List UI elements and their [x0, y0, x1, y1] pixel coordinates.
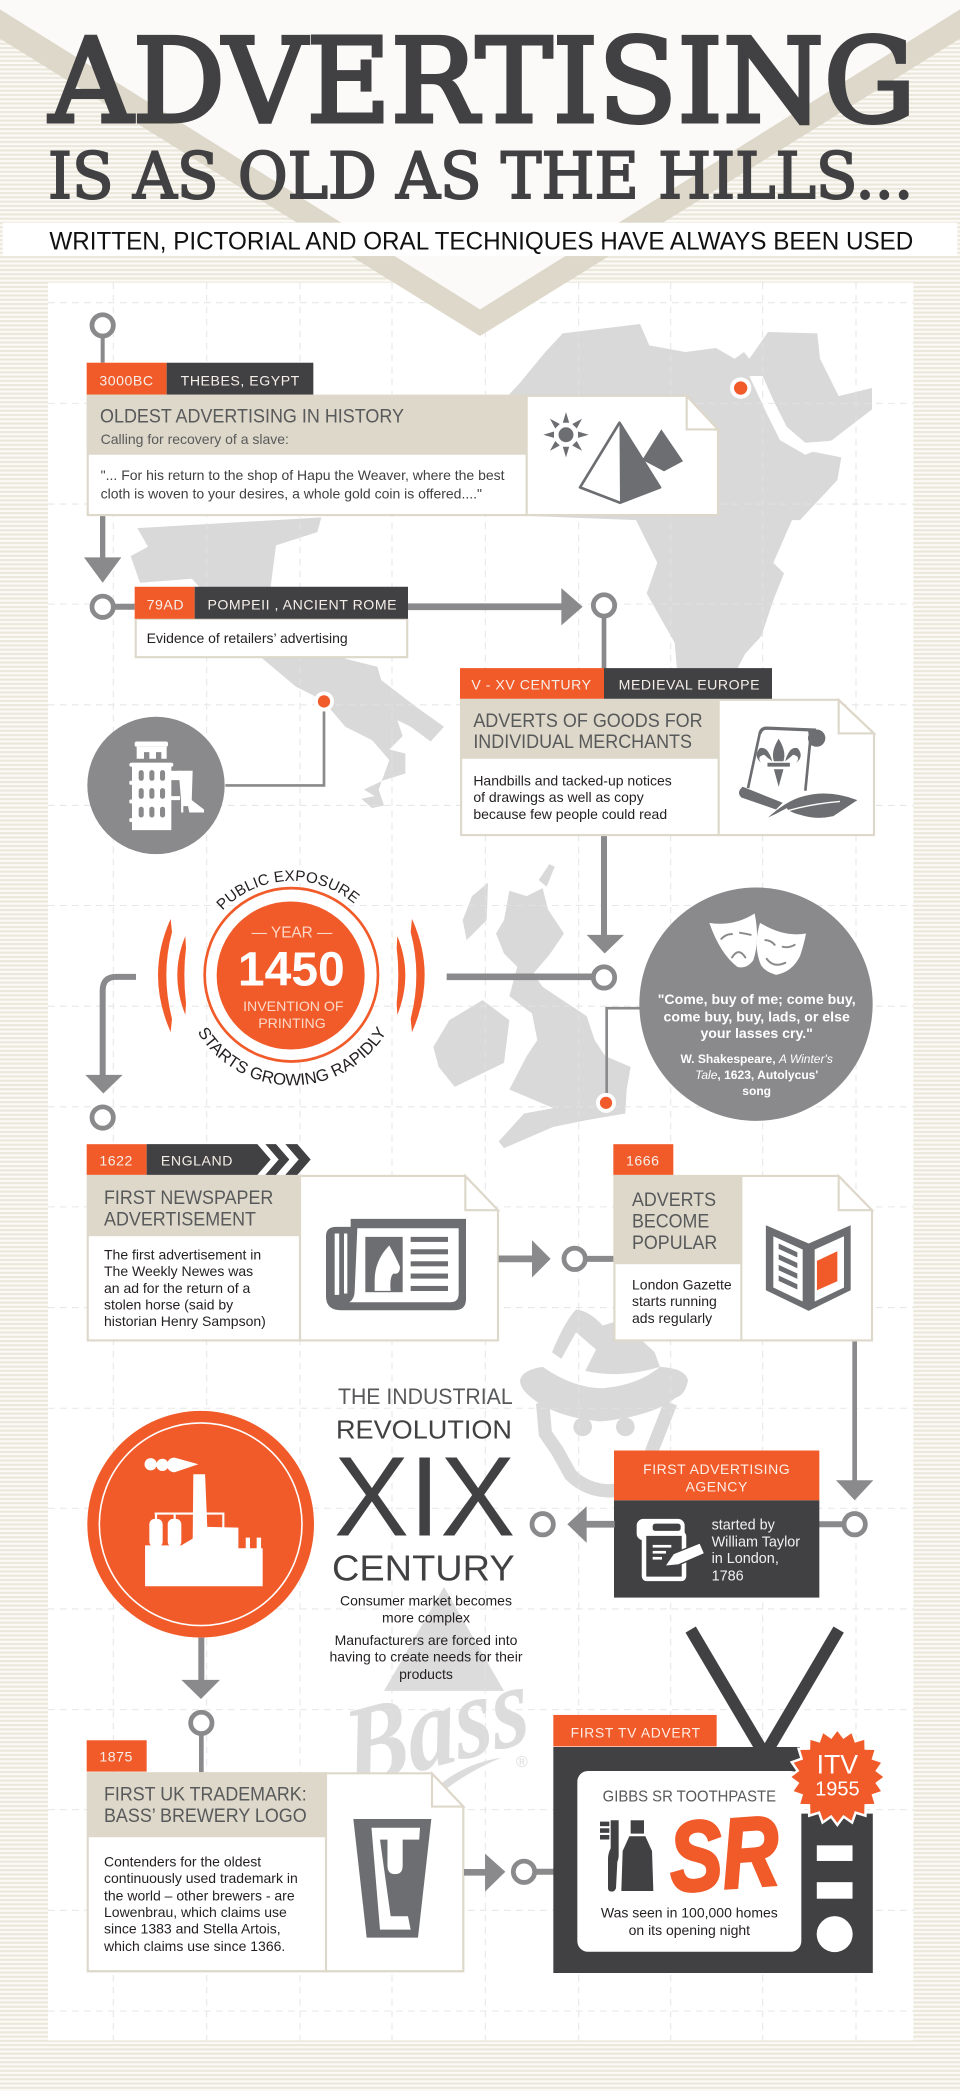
- industrial revolution heading: XIX: [334, 1434, 515, 1561]
- screen heading: GIBBS SR TOOTHPASTE: [603, 1789, 776, 1806]
- place tag: [604, 668, 772, 699]
- heading: ADVERTS: [632, 1190, 716, 1211]
- map: Italy: [131, 517, 444, 808]
- body: because few people could read: [473, 806, 667, 822]
- connector: arrow to medieval: [408, 588, 615, 669]
- icon: beer glass: [353, 1819, 431, 1938]
- body: The Weekly Newes was: [104, 1263, 253, 1279]
- ITV 1955 starburst: [791, 1731, 883, 1823]
- date tag: [460, 668, 604, 699]
- place tag with chevrons: [147, 1144, 311, 1175]
- industrial revolution heading: CENTURY: [332, 1547, 515, 1588]
- heading: ADVERTISEMENT: [104, 1210, 256, 1231]
- title: ADVERTISING: [48, 14, 916, 149]
- connector: 1622 to 1666: [499, 1240, 615, 1278]
- screen: [577, 1771, 801, 1952]
- connector: start node to first box: [92, 315, 113, 363]
- place tag: [195, 587, 408, 619]
- connector: trademark to TV: [464, 1854, 555, 1892]
- tag: FIRST TV ADVERT: [571, 1725, 701, 1741]
- title: IS AS OLD AS THE HILLS...: [48, 139, 913, 213]
- top white chevron area: [0, 0, 960, 309]
- date tag: 1622: [99, 1153, 133, 1169]
- subtitle band: WRITTEN, PICTORIAL AND ORAL TECHNIQUES HAVE ALWAYS BEEN USED: [49, 228, 913, 255]
- industrial revolution heading: [332, 1384, 515, 1588]
- caption: [243, 998, 344, 1031]
- Shakespeare circle: [607, 887, 873, 1121]
- connector: 1666 to agency: [819, 1342, 873, 1535]
- date tag: [87, 1740, 147, 1772]
- body: stolen horse (said by: [104, 1297, 233, 1313]
- card header: [615, 1176, 741, 1264]
- curved text bottom: [185, 1004, 399, 1085]
- heading: FIRST NEWSPAPER: [104, 1188, 273, 1209]
- quote: "Come, buy of me; come buy,: [658, 991, 856, 1007]
- header: AGENCY: [686, 1479, 748, 1495]
- SR logo: SR: [666, 1795, 782, 1913]
- panel: V-XV century Europe: [460, 668, 874, 836]
- industrial revolution text: having to create needs for their: [329, 1649, 523, 1665]
- body: Handbills and tacked-up notices: [473, 772, 672, 788]
- date tag: 1666: [626, 1153, 660, 1169]
- beige chevron band: [0, 9, 960, 336]
- card: [136, 619, 407, 657]
- icon: theatre masks: [709, 913, 806, 975]
- antenna: [691, 1630, 839, 1755]
- quote: "... For his return to the shop of Hapu the Weaver, where the best: [101, 467, 505, 483]
- year 1450 badge: PUBLIC EXPOSURE: [216, 870, 360, 910]
- sub heading: Calling for recovery of a slave:: [101, 431, 289, 447]
- ITV 1955 starburst: ITV: [817, 1750, 858, 1780]
- panel: 1875 first UK trademark: [87, 1740, 463, 1972]
- fold: [432, 1774, 463, 1807]
- industrial revolution text: products: [399, 1666, 453, 1682]
- heading: INDIVIDUAL MERCHANTS: [473, 732, 692, 753]
- industrial revolution text: more complex: [382, 1610, 470, 1626]
- text: [712, 1518, 800, 1584]
- heading: OLDEST ADVERTISING IN HISTORY: [100, 407, 404, 428]
- year 1450 badge: [158, 870, 425, 1086]
- icon: open book: [766, 1225, 851, 1311]
- year 1450 badge: STARTS GROWING RAPIDLY: [199, 1026, 384, 1086]
- map: British Isles: [433, 864, 631, 1148]
- place tag: [167, 363, 313, 395]
- place tag: POMPEII , ANCIENT ROME: [207, 596, 397, 612]
- icon: scroll and quill: [739, 728, 857, 819]
- text: 1786: [712, 1568, 744, 1584]
- marker: London: [596, 1093, 616, 1113]
- main white panel: [48, 283, 913, 2040]
- body: starts running: [632, 1293, 717, 1309]
- industrial revolution text: Consumer market becomes: [340, 1593, 512, 1609]
- heading: ADVERTS OF GOODS FOR: [473, 711, 703, 732]
- icon: Pompeii circle with colosseum and boot: [87, 703, 324, 854]
- heading: [104, 1784, 307, 1827]
- body: ads regularly: [632, 1310, 712, 1326]
- place tag: THEBES, EGYPT: [181, 372, 300, 388]
- icon: document and pen: [637, 1519, 705, 1579]
- date tag: V - XV CENTURY: [471, 676, 592, 692]
- body: of drawings as well as copy: [473, 789, 644, 805]
- card: [461, 700, 874, 835]
- tv controls: [817, 1845, 853, 1952]
- fold: [839, 1176, 872, 1210]
- header: FIRST ADVERTISING: [643, 1461, 790, 1477]
- fold: [687, 396, 718, 429]
- body: [103, 1854, 298, 1954]
- quote: your lasses cry.": [700, 1025, 813, 1041]
- panel: 1666: [613, 1144, 872, 1342]
- card header: [461, 700, 719, 759]
- connector: arrow to UK node: [447, 836, 624, 988]
- heading: POPULAR: [632, 1233, 717, 1254]
- label: year: — YEAR —: [252, 924, 333, 941]
- body: The first advertisement in: [104, 1247, 261, 1263]
- outer ring: [205, 888, 378, 1062]
- date tag: [87, 1144, 147, 1175]
- body: historian Henry Sampson): [104, 1313, 266, 1329]
- panel: first advertising agency: [614, 1450, 819, 1598]
- marker: Pompeii: [314, 691, 334, 711]
- date tag: [613, 1144, 673, 1175]
- body: [473, 772, 672, 822]
- quote: come buy, buy, lads, or else: [664, 1008, 850, 1024]
- body: [632, 1277, 732, 1326]
- heading: [473, 711, 703, 753]
- icon: toothbrush: [600, 1820, 619, 1892]
- attribution: song: [742, 1084, 771, 1098]
- text: started by: [712, 1518, 776, 1534]
- dashed grid: [48, 283, 913, 2040]
- icon: newspaper: [326, 1219, 466, 1310]
- text: in London,: [712, 1551, 779, 1567]
- Red Sea gap: [749, 376, 841, 455]
- text: William Taylor: [712, 1535, 800, 1551]
- curved text top: [200, 881, 384, 949]
- connector: agency to XIX: [532, 1506, 615, 1543]
- body: since 1383 and Stella Artois,: [104, 1921, 281, 1937]
- icon: factory: [145, 1458, 263, 1586]
- panel: 3000BC Thebes: [87, 363, 718, 516]
- heading: FIRST UK TRADEMARK:: [104, 1784, 307, 1805]
- number: 1450: [238, 943, 345, 996]
- body: Contenders for the oldest: [104, 1854, 261, 1870]
- date tag: 79AD: [147, 596, 184, 612]
- industrial revolution text: Manufacturers are forced into: [335, 1632, 518, 1648]
- marker: Thebes: [730, 377, 751, 399]
- connector: factory to 1875: [181, 1638, 220, 1772]
- map: Bass triangle logo: ®: [516, 1754, 528, 1771]
- tv body: [553, 1747, 873, 1973]
- date tag: 1875: [99, 1749, 133, 1765]
- header: [614, 1450, 819, 1500]
- body: Lowenbrau, which claims use: [104, 1904, 287, 1920]
- attribution: [680, 1052, 833, 1098]
- fold: [839, 700, 874, 733]
- card: [614, 1176, 872, 1340]
- quote: [101, 467, 505, 502]
- quote: [658, 991, 856, 1041]
- card header: [87, 395, 527, 455]
- caption: PRINTING: [258, 1015, 326, 1031]
- card header: [88, 1772, 326, 1837]
- text: Evidence of retailers’ advertising: [147, 630, 348, 646]
- signal arcs: [158, 919, 425, 1032]
- ITV 1955 starburst: 1955: [815, 1779, 860, 1801]
- caption: [601, 1905, 778, 1938]
- tag: [553, 1715, 717, 1746]
- place tag with chevrons: ENGLAND: [161, 1153, 233, 1169]
- attribution: Tale, 1623, Autolycus': [695, 1068, 818, 1082]
- panel: 79AD Pompeii: [135, 587, 408, 657]
- panel: 1622 England: [87, 1144, 498, 1342]
- industrial revolution heading: THE INDUSTRIAL: [338, 1384, 513, 1409]
- connector: arrow to 79AD: [84, 516, 135, 617]
- date tag: [87, 363, 167, 395]
- heading: [632, 1190, 717, 1254]
- heading: [104, 1188, 273, 1231]
- place tag: MEDIEVAL EUROPE: [619, 676, 760, 692]
- card: [88, 396, 718, 515]
- industrial revolution heading: REVOLUTION: [336, 1415, 512, 1445]
- orange disc: [217, 901, 365, 1050]
- body: London Gazette: [632, 1277, 732, 1293]
- card header: [88, 1176, 300, 1236]
- quote: cloth is woven to your desires, a whole gold coin is offered....": [101, 486, 482, 502]
- industrial revolution text: [329, 1593, 523, 1682]
- heading: BECOME: [632, 1212, 709, 1233]
- map: Bass triangle logo: Bass: [335, 1638, 535, 1815]
- caption: Was seen in 100,000 homes: [601, 1905, 778, 1921]
- body: continuously used trademark in: [104, 1870, 298, 1886]
- attribution: W. Shakespeare, A Winter's: [680, 1052, 833, 1066]
- map: wizard head silhouette: [520, 1310, 688, 1491]
- body: [104, 1247, 266, 1329]
- map: Africa: [504, 324, 872, 673]
- icon: pyramids: [580, 423, 684, 503]
- icon: toothpaste tube: [621, 1820, 653, 1891]
- TV first advert: [553, 1630, 883, 1973]
- date tag: 3000BC: [99, 372, 154, 388]
- heading: BASS’ BREWERY LOGO: [104, 1806, 307, 1827]
- factory circle: [87, 1411, 314, 1638]
- body: the world – other brewers - are: [104, 1887, 295, 1903]
- connector: 1450 to 1622: [85, 977, 136, 1128]
- card: [88, 1176, 498, 1340]
- icon: sun: [543, 412, 589, 457]
- date tag: [135, 587, 195, 619]
- title: [48, 14, 916, 213]
- card: [88, 1773, 463, 1971]
- fold: [465, 1176, 498, 1210]
- body: which claims use since 1366.: [103, 1938, 285, 1954]
- body: an ad for the return of a: [104, 1280, 251, 1296]
- caption: INVENTION OF: [243, 998, 344, 1014]
- caption: on its opening night: [629, 1922, 750, 1938]
